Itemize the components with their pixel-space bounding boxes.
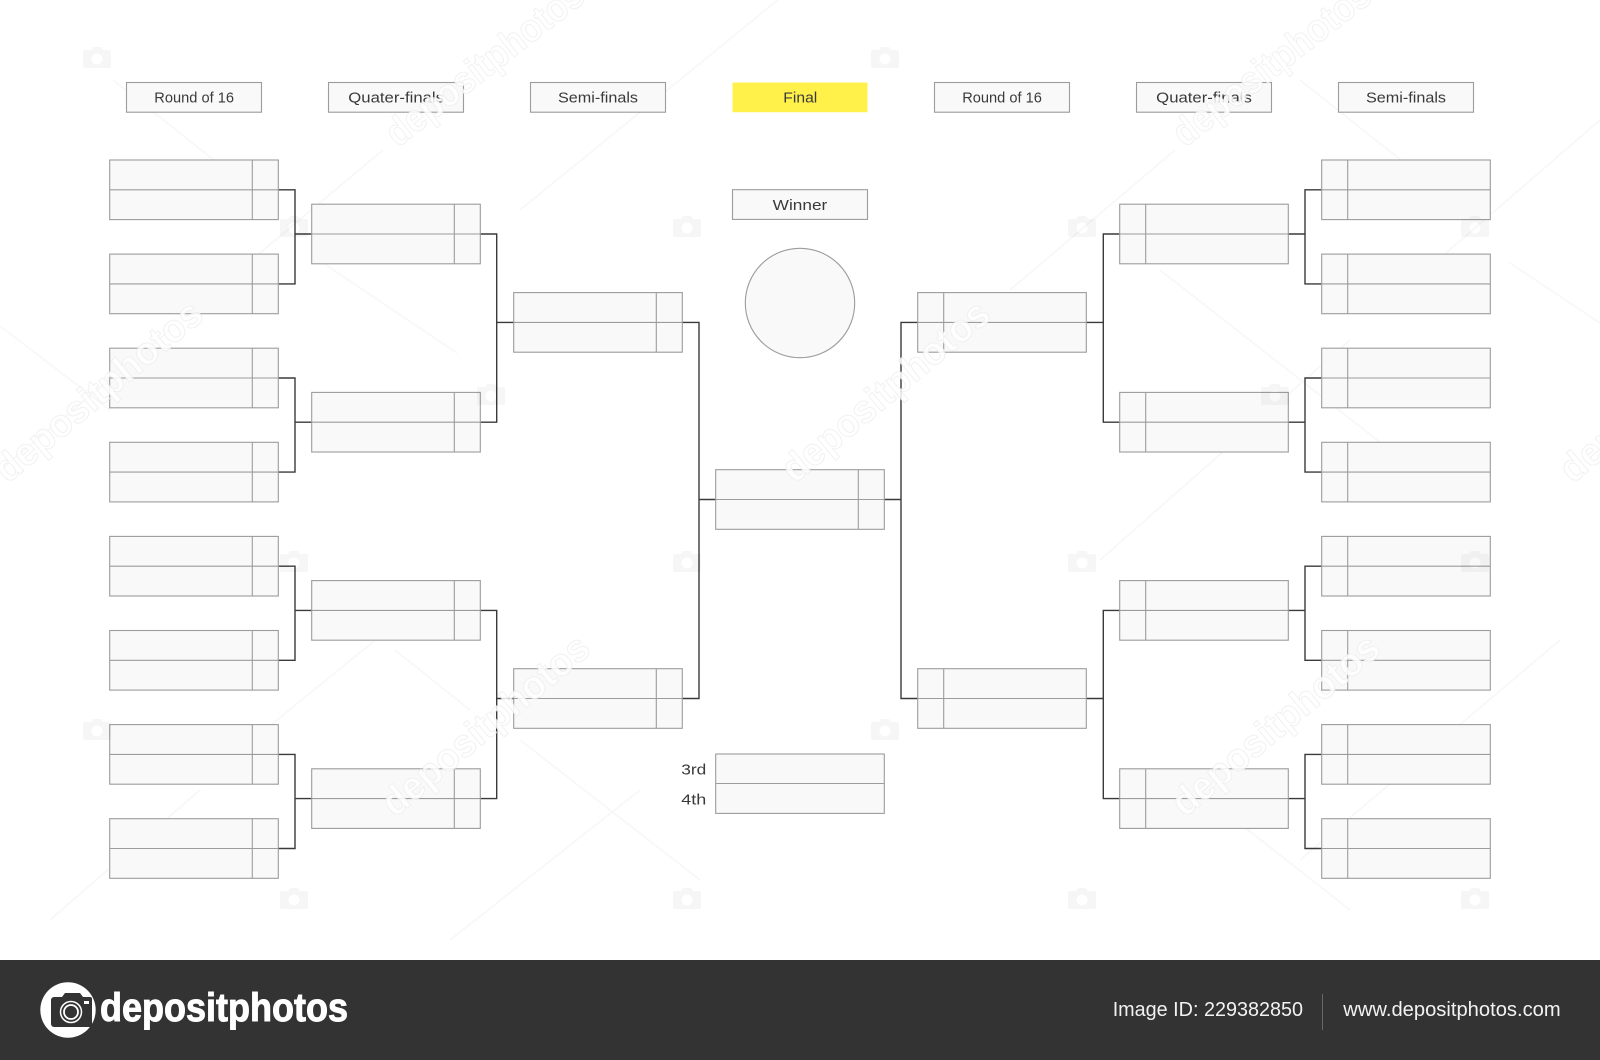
- winner label: Winner: [773, 197, 827, 214]
- third and fourth place box: [681, 754, 884, 813]
- footer divider: [1322, 994, 1323, 1030]
- right quarter-final matches: [1120, 204, 1288, 828]
- winner trophy circle: [745, 248, 855, 358]
- round header: Round of 16 right: [934, 82, 1070, 112]
- left round of 16 matches: [110, 160, 278, 878]
- footer bar: [0, 960, 1600, 1060]
- round header: Semi-finals right: [1338, 82, 1474, 112]
- round header: Final: Final: [783, 90, 817, 106]
- round header: Round of 16: Round of 16: [154, 90, 234, 106]
- final match: [716, 470, 884, 529]
- watermark wordmarks: [0, 0, 1600, 825]
- round header: Round of 16 right: Round of 16: [962, 90, 1042, 106]
- round header: Semi-finals: Semi-finals: [558, 90, 638, 106]
- round header: Quarter-finals: Quater-finals: [348, 90, 444, 106]
- third and fourth place box: 3rd: [681, 761, 706, 778]
- round header: Semi-finals right: Semi-finals: [1366, 90, 1446, 106]
- third and fourth place box: 4th: [681, 791, 706, 808]
- left semi-final matches: [514, 293, 682, 728]
- round header: Final: [732, 82, 868, 112]
- round header: Quarter-finals right: Quater-finals: [1156, 90, 1252, 106]
- winner label: [732, 190, 868, 219]
- image id: Image ID: 229382850: [1113, 999, 1303, 1021]
- icon: camera logo: [40, 982, 96, 1038]
- round header: Quarter-finals: [328, 82, 464, 112]
- left quarter-final matches: [312, 204, 480, 828]
- round header: Quarter-finals right: [1136, 82, 1272, 112]
- watermark wordmarks: depositphotos: [373, 626, 598, 825]
- round header: Round of 16: [126, 82, 262, 112]
- connectors: left bracket: [278, 190, 716, 849]
- right round of 16 matches: [1322, 160, 1490, 878]
- logo wordmark: depositphotos: [100, 986, 348, 1030]
- round header: Semi-finals: [530, 82, 666, 112]
- watermark wordmarks: depositphotos: [1163, 626, 1388, 825]
- right semi-final matches: [918, 293, 1086, 728]
- watermark wordmarks: depositphotos: [773, 292, 998, 491]
- watermark camera icons: [83, 47, 1489, 909]
- website url: www.depositphotos.com: [1342, 999, 1561, 1021]
- connectors: right bracket: [884, 190, 1322, 849]
